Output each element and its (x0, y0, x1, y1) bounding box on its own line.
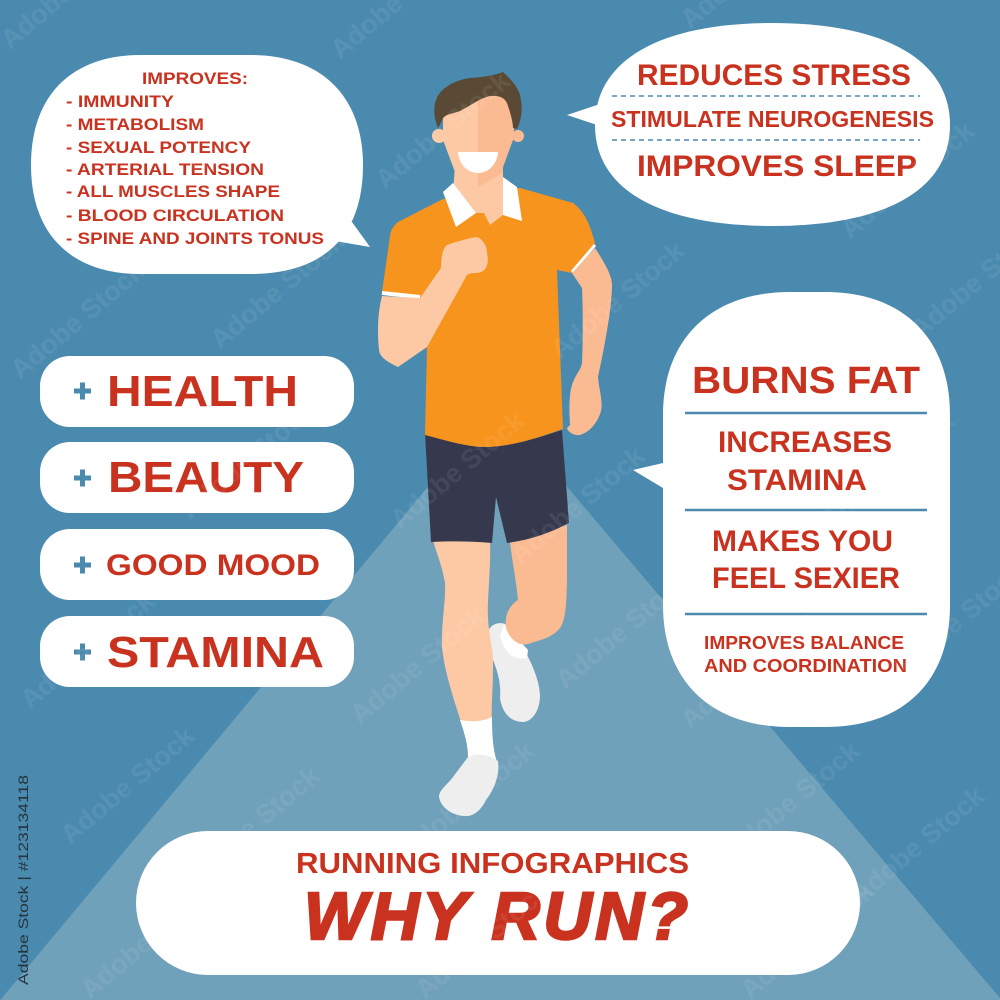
makes you feel sexier: FEEL SEXIER (712, 562, 900, 595)
rear leg (506, 525, 567, 645)
watermark pattern: Adobe Stock (385, 405, 531, 535)
list items: - BLOOD CIRCULATION (66, 206, 284, 225)
increases stamina (718, 426, 892, 497)
speech bubble: physical benefits (633, 292, 950, 727)
neck shadow (478, 165, 503, 187)
neck (453, 165, 503, 225)
pill: stamina: STAMINA (107, 628, 324, 677)
swinging arm (567, 248, 612, 435)
left sleeve stripe (382, 293, 420, 297)
collar left (443, 183, 476, 227)
shorts (425, 430, 569, 543)
burns fat: BURNS FAT (692, 360, 920, 402)
pill: stamina (40, 616, 354, 687)
watermark pattern: Adobe Stock (15, 585, 161, 715)
list items (66, 92, 324, 248)
watermark pattern: Adobe Stock (835, 115, 981, 245)
watermark pattern: Adobe Stock (545, 235, 691, 365)
pill: beauty (40, 442, 354, 513)
road light beam (0, 404, 1000, 1000)
subtitle: RUNNING INFOGRAPHICS (296, 848, 689, 880)
watermark pattern: Adobe Stock (395, 735, 541, 865)
watermark pattern: Adobe Stock (675, 605, 821, 735)
watermark pattern: Adobe Stock (180, 760, 326, 890)
watermark pattern: Adobe Stock (175, 395, 321, 525)
makes you feel sexier: MAKES YOU (712, 525, 893, 558)
pill: good mood (40, 529, 354, 600)
watermark pattern: Adobe Stock (370, 65, 516, 195)
front leg (433, 540, 493, 725)
watermark pattern: Adobe Stock (345, 600, 491, 730)
icon: rear shoe (488, 623, 540, 722)
smile (458, 152, 498, 173)
watermark pattern: Adobe Stock (505, 440, 651, 570)
list items: - SPINE AND JOINTS TONUS (66, 229, 324, 248)
pill: health (40, 356, 354, 427)
title banner (136, 831, 860, 975)
watermark pattern: Adobe Stock (115, 115, 261, 245)
bent arm (378, 237, 488, 367)
pill: beauty: BEAUTY (108, 453, 304, 502)
speech bubble: improves list (31, 55, 370, 274)
increases stamina: INCREASES (718, 426, 892, 459)
list items: - ALL MUSCLES SHAPE (66, 182, 280, 201)
rear sock (500, 624, 528, 658)
stock credit: Adobe Stock | #123134118 (15, 775, 31, 985)
watermark pattern: Adobe Stock (720, 735, 866, 865)
icon: front shoe (439, 754, 498, 816)
improves balance and coordination: IMPROVES BALANCE (704, 633, 904, 653)
watermark pattern: Adobe Stock (205, 225, 351, 355)
list items: - METABOLISM (66, 115, 204, 134)
list heading: IMPROVES: (142, 69, 248, 88)
list items: - ARTERIAL TENSION (66, 160, 264, 179)
stimulate neurogenesis: STIMULATE NEUROGENESIS (611, 106, 934, 132)
shirt (382, 188, 595, 447)
list items: - IMMUNITY (66, 92, 175, 111)
ear right (512, 130, 524, 142)
improves sleep: IMPROVES SLEEP (637, 150, 917, 183)
pill: good mood: GOOD MOOD (106, 549, 320, 582)
watermark pattern: Adobe Stock (5, 255, 151, 385)
main title: WHY RUN? (304, 879, 688, 954)
front sock (460, 717, 497, 762)
face left half (443, 90, 478, 187)
makes you feel sexier (712, 525, 900, 595)
speech bubble: mental benefits (567, 23, 950, 226)
runner figure (378, 72, 612, 816)
improves balance and coordination: AND COORDINATION (704, 656, 907, 676)
hair (434, 72, 522, 129)
watermark pattern: Adobe Stock (845, 780, 991, 910)
right sleeve stripe (572, 245, 595, 272)
ear left (432, 129, 446, 143)
pill: health: HEALTH (107, 367, 298, 416)
face right half (478, 90, 515, 187)
watermark pattern: Adobe Stock (815, 405, 961, 535)
watermark pattern: Adobe Stock (550, 565, 696, 695)
collar right (503, 177, 522, 221)
reduces stress: REDUCES STRESS (637, 59, 911, 92)
watermark pattern: Adobe Stock (55, 720, 201, 850)
improves balance and coordination (704, 633, 907, 676)
list items: - SEXUAL POTENCY (66, 138, 252, 157)
increases stamina: STAMINA (727, 464, 867, 497)
